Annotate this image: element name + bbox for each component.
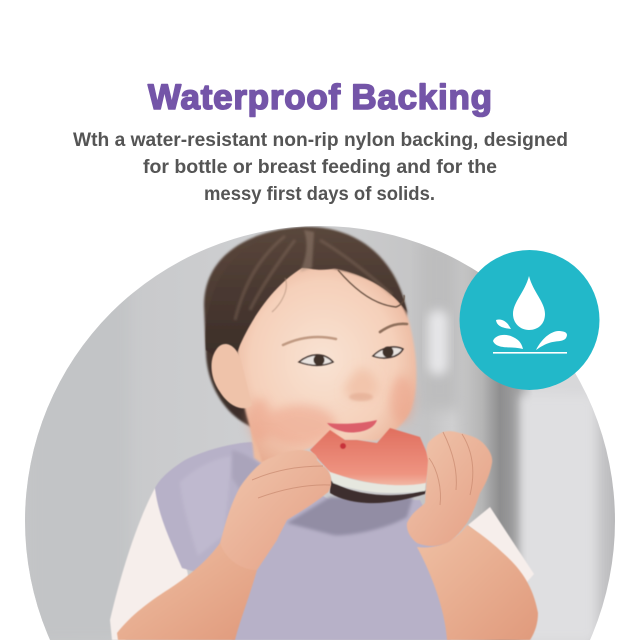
bib [155,442,470,640]
description text [73,129,568,205]
description text: for bottle or breast feeding and for the [143,156,497,178]
description text: messy first days of solids. [204,183,435,205]
photo background [20,220,620,640]
left hand [220,450,331,570]
icon: drop and splash [493,276,567,354]
cheek blush [248,376,414,445]
melon rind [328,470,426,493]
title: Waterproof Backing [148,78,492,117]
bib shadow under melon [287,497,413,535]
right hand [407,431,492,546]
left arm [117,543,257,640]
t-shirt [110,488,534,640]
finger creases [252,432,473,505]
face [237,266,416,462]
description text: Wth a water-resistant non-rip nylon backing, designed [73,129,568,151]
melon flesh [310,428,430,485]
ear [211,344,252,408]
eyes [299,355,333,365]
circular photo: toddler eating watermelon [20,220,620,640]
hair back [204,227,407,430]
hair fringe [206,229,407,365]
mouth [327,420,377,432]
icon: water drop badge [460,250,600,390]
eyebrows [283,337,336,345]
neck [249,423,264,464]
facial features [283,324,407,432]
nose [344,368,378,400]
badge circle [460,250,600,390]
right arm [417,525,538,640]
melon skin [330,480,426,503]
watermelon [310,428,430,503]
